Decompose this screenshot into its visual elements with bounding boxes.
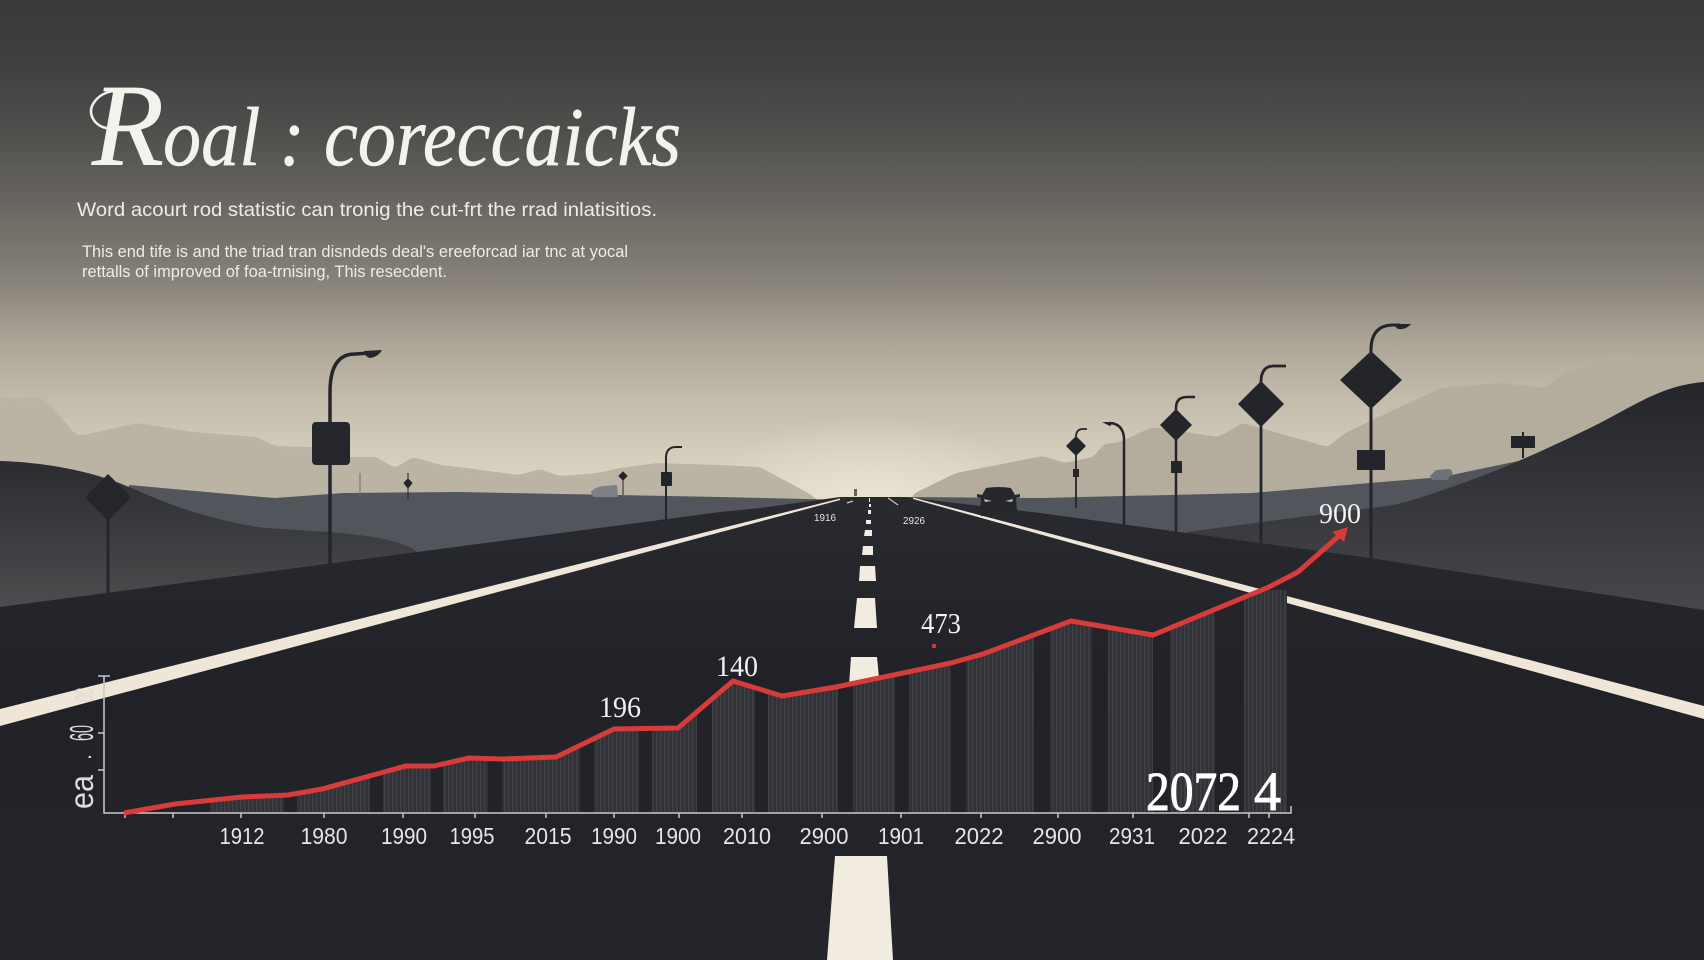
total label: 4 xyxy=(1254,761,1281,822)
chart: oc xyxy=(63,688,100,702)
body text xyxy=(82,243,628,281)
x axis labels: 2900 xyxy=(1032,823,1082,849)
value labels: 140 xyxy=(716,650,758,683)
subtitle: Word acourt rod statistic can tronig the cut-frt the rrad inlatisitios. xyxy=(77,199,657,221)
car silhouette xyxy=(977,487,1020,516)
title: oal : coreccaicks xyxy=(163,91,681,184)
x axis labels: 1900 xyxy=(655,823,701,849)
road edge line left xyxy=(0,498,840,726)
dark foreground hill right xyxy=(1188,382,1704,640)
value labels: 196 xyxy=(599,691,641,724)
far road markings xyxy=(847,498,898,505)
small boat on hill xyxy=(1430,469,1453,480)
lamp post B xyxy=(1102,422,1124,525)
body text: rettalls of improved of foa-trnising, This resecdent. xyxy=(82,263,447,281)
title xyxy=(91,60,681,191)
large lamp post with sign xyxy=(312,350,382,568)
small roadside sign right xyxy=(1511,432,1535,458)
road surface xyxy=(0,497,1704,960)
x axis labels: 2015 xyxy=(524,823,572,849)
x axis labels: 2931 xyxy=(1109,823,1155,849)
far lamp post left xyxy=(661,447,682,522)
mid-ground plain left xyxy=(129,485,850,600)
distant hills left xyxy=(0,395,830,640)
x axis labels: 2022 xyxy=(1178,823,1228,849)
bars xyxy=(210,590,1287,813)
y axis labels: . xyxy=(71,754,96,760)
x axis labels: 1990 xyxy=(591,823,637,849)
sky background xyxy=(0,0,1704,560)
sign post C xyxy=(1160,397,1195,532)
x axis labels: 1990 xyxy=(381,823,427,849)
distant hills right xyxy=(900,353,1704,600)
far road label left: 1916 xyxy=(814,512,836,524)
dark foreground hill left xyxy=(0,461,430,630)
x axis labels: 1901 xyxy=(878,823,924,849)
x axis labels: 2010 xyxy=(723,823,771,849)
sign post A xyxy=(1066,429,1087,508)
diamond sign left xyxy=(85,474,131,602)
body text: This end tife is and the triad tran disndeds deal's ereeforcad iar tnc at yocal xyxy=(82,243,628,261)
centre dashes xyxy=(827,498,893,960)
y axis labels xyxy=(63,688,100,809)
y axis labels: ea xyxy=(63,774,100,809)
total label: 2072 xyxy=(1146,761,1241,822)
axes and ticks xyxy=(98,676,1291,818)
x axis labels xyxy=(220,823,1295,849)
x axis labels: 1995 xyxy=(450,823,494,849)
x axis labels: 1980 xyxy=(300,823,348,849)
far road label right: 2926 xyxy=(903,515,925,527)
x axis labels: 2900 xyxy=(800,823,848,849)
chart xyxy=(63,499,1361,849)
value labels: 473 xyxy=(921,608,961,640)
x axis labels: 1912 xyxy=(220,823,264,849)
title: R xyxy=(91,60,164,191)
value labels: 900 xyxy=(1319,499,1361,530)
small far signs left xyxy=(360,472,627,500)
red marker dot xyxy=(932,644,936,648)
mid-ground plain right xyxy=(905,460,1560,600)
sign post D xyxy=(1238,366,1286,543)
y axis labels: 60 xyxy=(63,725,100,741)
x axis labels: 2224 xyxy=(1247,823,1295,849)
sign post E xyxy=(1340,324,1411,559)
value labels xyxy=(599,499,1361,724)
x axis labels: 2022 xyxy=(954,823,1004,849)
distant figure xyxy=(854,489,857,496)
small far vehicle left xyxy=(591,485,618,497)
red trend line with arrow xyxy=(124,527,1348,813)
road edge line right xyxy=(913,498,1704,719)
